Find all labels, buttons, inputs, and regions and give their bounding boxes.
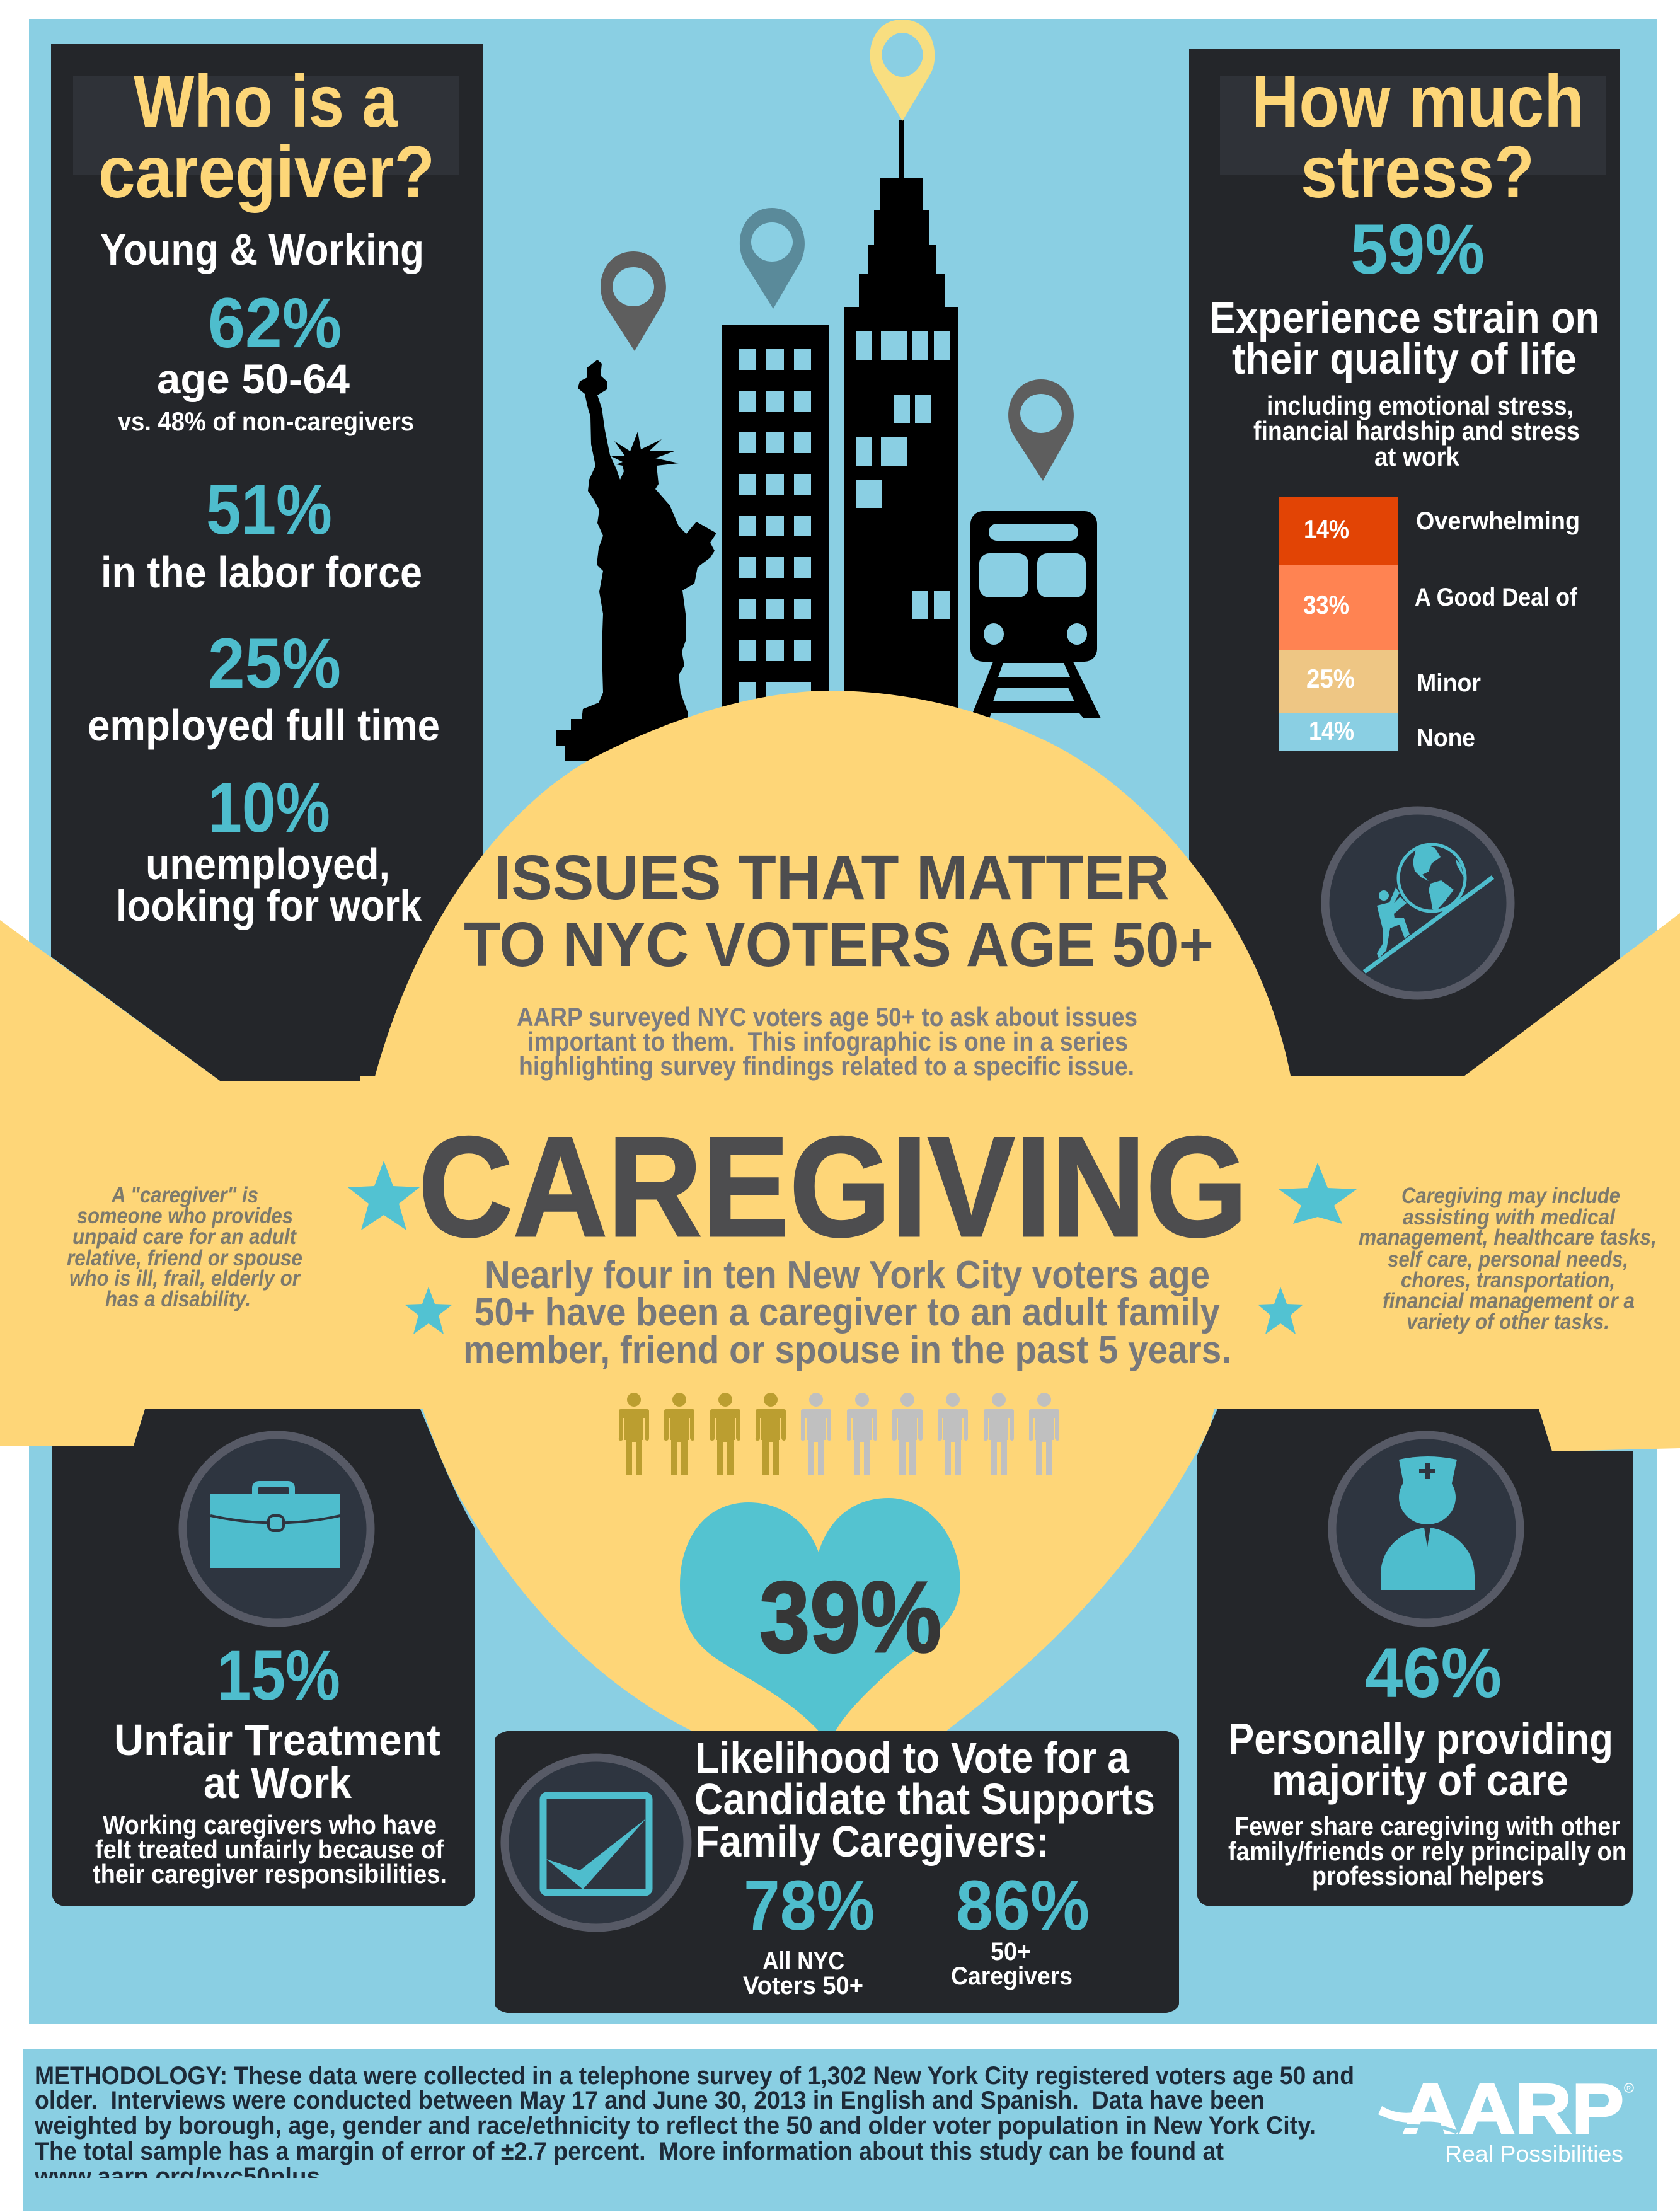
panel: likelihood to vote xyxy=(495,1731,1179,2013)
stat: 10%: looking for work xyxy=(116,881,422,930)
panel: personally providing care xyxy=(1197,1409,1633,1906)
text: likelihood heading: Family Caregivers: xyxy=(695,1817,1049,1866)
footer: methodology xyxy=(23,2049,1657,2211)
text: personally providing: professional helpers xyxy=(1312,1861,1544,1891)
note: caregiving tasks: chores, transportation, xyxy=(1401,1268,1615,1293)
title: issues that matter: TO NYC VOTERS AGE 50+ xyxy=(464,909,1214,980)
text: unfair treatment: Unfair Treatment xyxy=(114,1715,440,1765)
stat: 51% xyxy=(101,470,422,597)
stacked bar chart: Minor xyxy=(1417,669,1481,697)
heading: who is a caregiver: Who is a xyxy=(134,60,398,142)
note: caregiver definition: has a disability. xyxy=(105,1287,251,1311)
note: caregiving tasks: variety of other tasks. xyxy=(1407,1310,1609,1334)
text: unfair treatment xyxy=(93,1715,447,1889)
text: unfair treatment: at Work xyxy=(204,1758,352,1807)
stacked bar chart: 14% xyxy=(1309,716,1354,746)
text: personally providing: Fewer share caregiving with other xyxy=(1234,1811,1620,1841)
text: methodology: METHODOLOGY: These data were collected in a telephone survey of 1,302 New York City registered voters age 50 and xyxy=(35,2062,1354,2090)
note: caregiving tasks: self care, personal needs, xyxy=(1388,1247,1628,1272)
icon: statue of liberty xyxy=(556,360,716,761)
title: issues that matter xyxy=(464,843,1214,980)
stacked bar chart: 25% xyxy=(1306,664,1355,693)
text: methodology: older. Interviews were conducted between May 17 and June 30, 2013 in English and Spanish. Data have been xyxy=(35,2087,1265,2114)
note: caregiving tasks: Caregiving may include xyxy=(1401,1184,1620,1208)
text: nearly four in ten xyxy=(463,1253,1231,1372)
icon: star small right xyxy=(1258,1287,1303,1334)
stat: 86%: Caregivers xyxy=(951,1962,1073,1990)
text: likelihood heading: Likelihood to Vote for a xyxy=(695,1733,1130,1782)
stat: 86% xyxy=(951,1866,1090,1990)
text: likelihood heading xyxy=(694,1733,1155,1866)
stat: 78% xyxy=(743,1866,875,2000)
text: personally providing xyxy=(1228,1714,1626,1891)
icon: person pushing globe uphill xyxy=(1325,810,1510,996)
icon: nurse xyxy=(1332,1435,1520,1623)
icon: checkbox xyxy=(505,1758,688,1928)
text: nearly four in ten: Nearly four in ten New York City voters age xyxy=(485,1253,1210,1297)
note: caregiver definition xyxy=(67,1183,302,1311)
heading: who is a caregiver xyxy=(98,60,435,213)
stacked bar chart: 14% xyxy=(1304,514,1349,544)
text: nearly four in ten: member, friend or spouse in the past 5 years. xyxy=(463,1328,1231,1372)
text: personally providing: Personally providing xyxy=(1228,1714,1613,1763)
stat: 62%: vs. 48% of non-caregivers xyxy=(118,406,414,436)
stat: 10%: unemployed, xyxy=(146,839,390,889)
note: caregiver definition: A "caregiver" is xyxy=(111,1183,258,1207)
title: caregiving: CAREGIVING xyxy=(418,1107,1248,1266)
note: caregiving tasks xyxy=(1359,1184,1657,1334)
text: unfair treatment: Working caregivers who have xyxy=(103,1810,437,1840)
stat: 51%: 51% xyxy=(206,470,332,549)
text: nearly four in ten: 50+ have been a caregiver to an adult family xyxy=(475,1291,1220,1334)
stat: 46%: 46% xyxy=(1365,1633,1502,1712)
note: caregiving tasks: management, healthcare tasks, xyxy=(1359,1225,1657,1250)
panel: how much stress xyxy=(1189,49,1620,1079)
icon: gray map pin left xyxy=(601,251,666,351)
intro text: highlighting survey findings related to a specific issue. xyxy=(519,1051,1134,1081)
intro text xyxy=(517,1002,1137,1081)
stat: 10% xyxy=(116,768,422,930)
yellow ribbon and central oval xyxy=(0,691,1680,1732)
stat: 15%: 15% xyxy=(217,1636,340,1715)
icon: empire state building xyxy=(844,120,958,718)
stat: 25%: employed full time xyxy=(88,701,440,750)
note: caregiver definition: who is ill, frail, elderly or xyxy=(69,1266,301,1291)
stat: 62%: 62% xyxy=(208,284,342,362)
icon: star large left xyxy=(348,1161,420,1230)
stat: 59%: 59% xyxy=(1350,210,1485,289)
stat: 25% xyxy=(88,624,440,750)
heart with 39%: 39% xyxy=(759,1560,941,1673)
heading: how much stress: How much xyxy=(1251,60,1584,142)
stacked bar chart: A Good Deal of xyxy=(1415,584,1578,611)
stat: 78%: 78% xyxy=(744,1866,875,1945)
stat: 86%: 50+ xyxy=(991,1938,1031,1966)
icon: subway train xyxy=(964,511,1101,734)
text: experience strain: financial hardship and stress xyxy=(1253,416,1580,446)
heading: how much stress: stress? xyxy=(1301,130,1534,213)
intro text: important to them. This infographic is one in a series xyxy=(527,1027,1128,1056)
text: likelihood heading: Candidate that Supports xyxy=(694,1775,1155,1824)
intro text: AARP surveyed NYC voters age 50+ to ask about issues xyxy=(517,1002,1137,1032)
stat: 25%: 25% xyxy=(208,624,341,703)
text: methodology xyxy=(34,2062,1354,2191)
pictogram: four in ten people xyxy=(619,1393,1059,1475)
text: unfair treatment: felt treated unfairly because of xyxy=(95,1835,444,1864)
text: experience strain: including emotional stress, xyxy=(1267,391,1574,420)
stat: 78%: Voters 50+ xyxy=(743,1972,863,2000)
stat: 62% xyxy=(118,284,414,436)
stacked bar chart: 33% xyxy=(1303,590,1349,619)
stat: 51%: in the labor force xyxy=(101,548,422,597)
stacked bar chart: None xyxy=(1417,724,1475,752)
note: caregiver definition: relative, friend or spouse xyxy=(67,1246,302,1270)
subheading: Young & Working xyxy=(100,225,424,274)
text: personally providing: majority of care xyxy=(1272,1756,1568,1805)
panel: who is a caregiver xyxy=(51,44,483,1081)
icon: yellow map pin xyxy=(870,20,935,121)
stat: 62%: age 50-64 xyxy=(157,355,350,402)
heading: who is a caregiver: caregiver? xyxy=(98,130,435,213)
skyline illustration xyxy=(556,20,1101,761)
text: personally providing: family/friends or rely principally on xyxy=(1228,1836,1626,1866)
heading: how much stress xyxy=(1251,60,1584,213)
text: unfair treatment: their caregiver responsibilities. xyxy=(93,1859,447,1889)
text: methodology: weighted by borough, age, gender and race/ethnicity to reflect the 50 and older voter population in New York City. xyxy=(34,2112,1316,2140)
text: experience strain: at work xyxy=(1374,442,1460,471)
note: caregiver definition: someone who provides xyxy=(77,1204,293,1228)
icon: briefcase xyxy=(183,1435,371,1623)
logo: AARP: R xyxy=(1626,2085,1631,2092)
text: experience strain xyxy=(1209,293,1599,471)
logo: AARP: AARP xyxy=(1402,2070,1624,2148)
icon: teal map pin xyxy=(740,208,805,309)
text: methodology: www.aarp.org/nyc50plus xyxy=(34,2163,320,2191)
stacked bar chart xyxy=(1279,497,1580,752)
logo: AARP: Real Possibilities xyxy=(1445,2141,1623,2167)
text: methodology: The total sample has a margin of error of ±2.7 percent. More information about this study can be found at xyxy=(35,2138,1224,2165)
panel: unfair treatment at work xyxy=(52,1409,475,1906)
stat: 86%: 86% xyxy=(956,1866,1090,1945)
logo: AARP xyxy=(1378,2070,1633,2167)
note: caregiver definition: unpaid care for an adult xyxy=(72,1224,297,1249)
icon: gray map pin right xyxy=(1008,379,1074,481)
icon: star large right xyxy=(1279,1163,1357,1224)
note: caregiving tasks: financial management or a xyxy=(1383,1289,1635,1313)
note: caregiving tasks: assisting with medical xyxy=(1403,1205,1616,1230)
stacked bar chart: Overwhelming xyxy=(1416,507,1580,535)
text: experience strain: their quality of life xyxy=(1232,334,1577,383)
icon: star small left xyxy=(405,1287,452,1334)
title: issues that matter: ISSUES THAT MATTER xyxy=(494,843,1170,913)
stat: 78%: All NYC xyxy=(762,1947,844,1975)
text: experience strain: Experience strain on xyxy=(1209,293,1599,342)
heart with 39% xyxy=(680,1498,960,1734)
icon: office building xyxy=(722,325,829,716)
stat: 10%: 10% xyxy=(208,768,330,847)
